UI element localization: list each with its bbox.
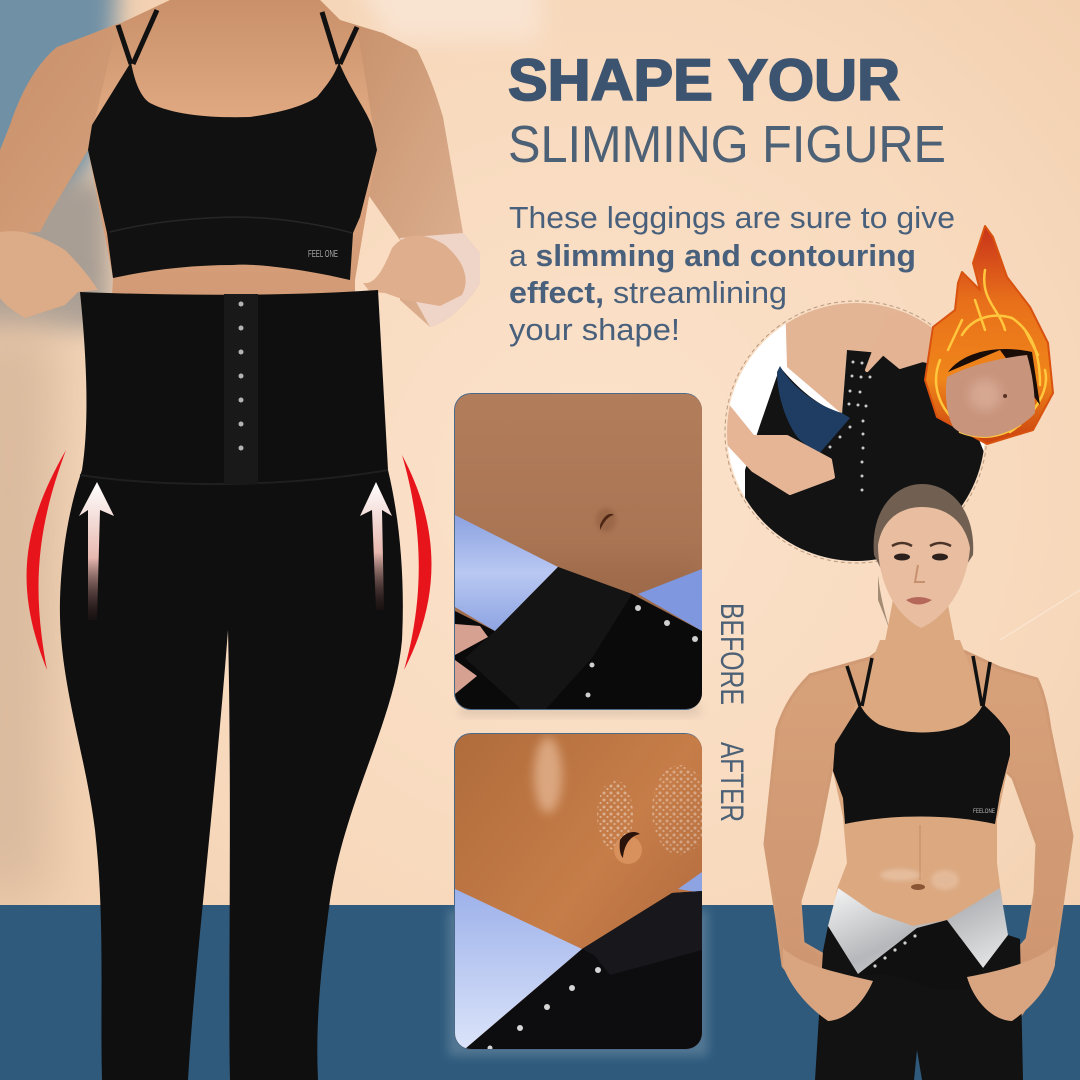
left arm and shoulder bbox=[765, 633, 892, 1020]
torso bbox=[828, 640, 1008, 940]
right model bbox=[765, 484, 1072, 1080]
title: SHAPE YOUR bbox=[508, 48, 900, 113]
bra: FEEL ONE bbox=[308, 249, 338, 260]
left arm bbox=[0, 0, 170, 235]
neck bbox=[883, 600, 957, 652]
ponytail bbox=[878, 575, 893, 640]
left model: leggings bbox=[60, 290, 403, 1080]
bra bbox=[847, 656, 990, 706]
abs and navel bbox=[880, 825, 959, 890]
silver waistband bbox=[828, 888, 1008, 974]
arrow: right up bbox=[360, 482, 392, 610]
forearm highlight bbox=[400, 233, 480, 327]
right hand bbox=[967, 945, 1055, 1021]
left hand bbox=[783, 948, 873, 1021]
arrow: left up bbox=[79, 482, 114, 620]
body text: your shape! bbox=[509, 312, 680, 347]
hook closure bbox=[224, 294, 258, 484]
chest and waist bbox=[88, 0, 377, 296]
body text: a slimming and contouring bbox=[509, 238, 916, 273]
curve: right red bbox=[402, 455, 432, 670]
waistband flap bbox=[858, 920, 983, 990]
before photo bbox=[454, 393, 702, 715]
label: before: BEFORE bbox=[714, 603, 750, 705]
after photo bbox=[448, 733, 708, 1056]
right model: FEELONE bbox=[973, 808, 995, 815]
face details bbox=[892, 543, 951, 604]
icon: flame badge bbox=[925, 226, 1053, 444]
right hand bbox=[363, 236, 466, 306]
title: SLIMMING FIGURE bbox=[508, 116, 946, 174]
body text: These leggings are sure to give bbox=[509, 200, 955, 235]
label: after: AFTER bbox=[714, 742, 750, 822]
body text: effect, streamlining bbox=[509, 275, 787, 310]
left model: upper body bbox=[0, 0, 480, 327]
leggings bbox=[815, 926, 1023, 1080]
body text bbox=[509, 200, 955, 347]
title bbox=[508, 48, 946, 174]
bra bbox=[88, 10, 377, 280]
left hand bbox=[0, 231, 98, 318]
hooks bbox=[873, 934, 917, 968]
curve: left red bbox=[27, 450, 66, 670]
right arm and shoulder bbox=[947, 633, 1072, 1021]
circle photo: waist closure bbox=[715, 296, 990, 570]
head bbox=[874, 484, 973, 575]
right arm bbox=[320, 0, 480, 327]
